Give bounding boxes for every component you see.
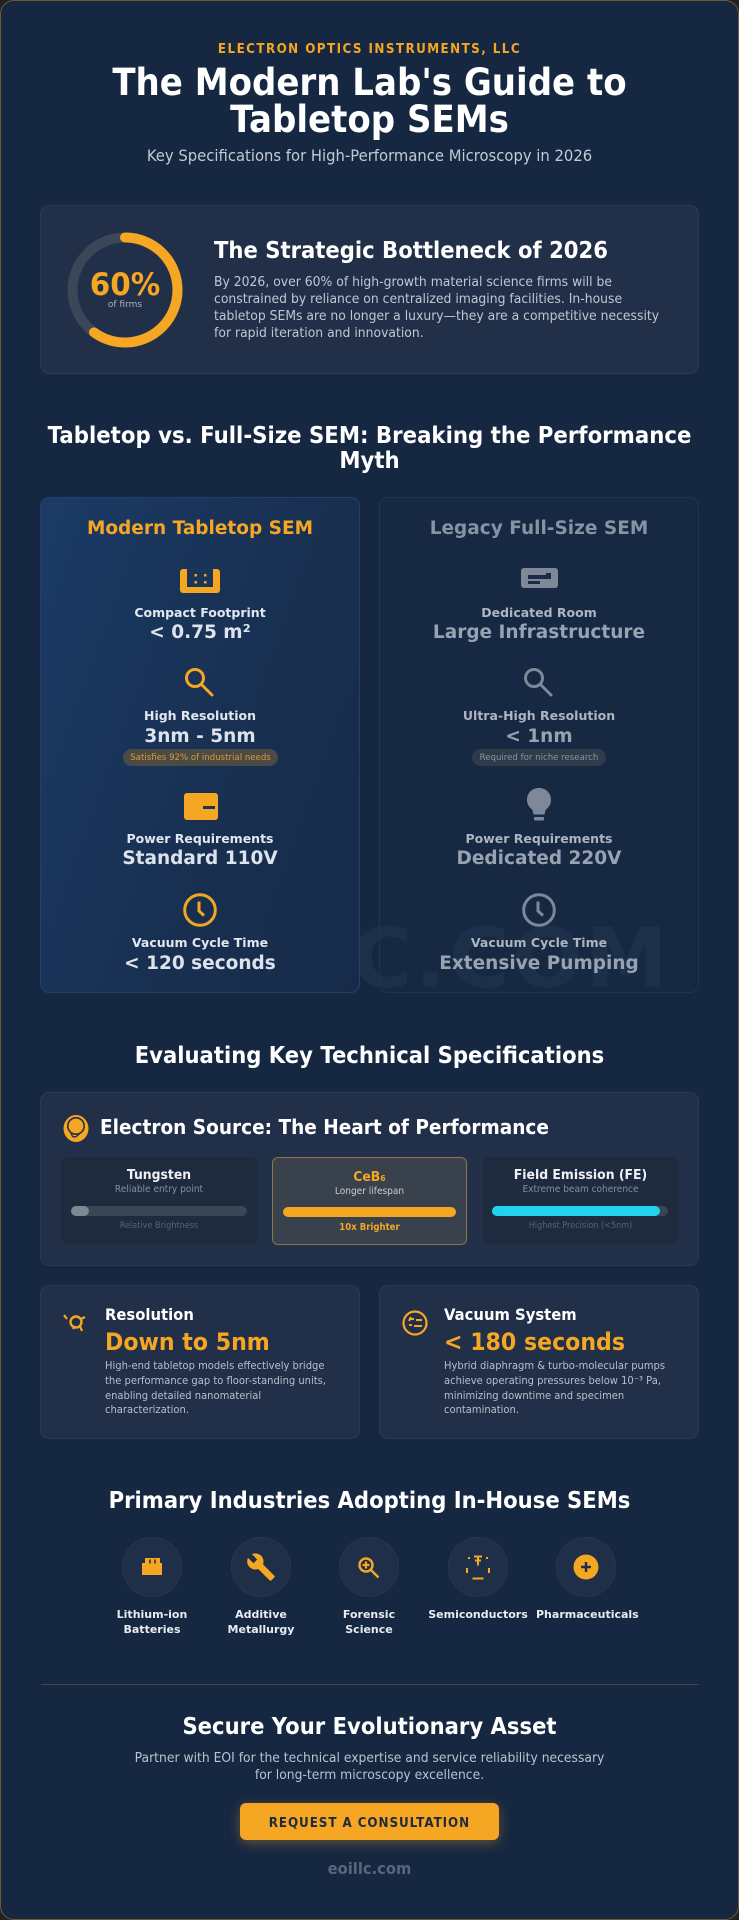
brightness bar <box>71 1206 247 1216</box>
section heading: specifications: Evaluating Key Technical Specifications <box>135 1043 604 1069</box>
icon: clock <box>183 893 217 927</box>
note pill <box>472 749 606 766</box>
CTA body text <box>31 1750 708 1784</box>
icon: clock <box>522 893 556 927</box>
icon: vacuum <box>402 1310 428 1336</box>
company name: ELECTRON OPTICS INSTRUMENTS, LLC <box>218 42 521 57</box>
title: The Modern Lab's Guide to <box>112 61 627 104</box>
card: field emission <box>483 1157 678 1244</box>
title <box>112 61 627 140</box>
spec: power requirements <box>122 793 278 869</box>
spec: high resolution <box>123 668 278 766</box>
CTA button <box>240 1803 499 1840</box>
card: tungsten <box>61 1157 257 1244</box>
icon: bulb <box>527 788 551 820</box>
caption: 10x Brighter <box>339 1222 400 1233</box>
label: Metallurgy <box>228 1622 294 1636</box>
value: < 1nm <box>505 726 573 747</box>
panel body text: By 2026, over 60% of high-growth material science firms will be <box>214 274 612 290</box>
call to action <box>135 1714 604 1878</box>
spec: ultra-high resolution <box>463 668 615 766</box>
name: Field Emission (FE) <box>514 1167 647 1183</box>
panel body text: tabletop SEMs are no longer a luxury—they are a competitive necessity <box>214 308 659 324</box>
panel body text: constrained by reliance on centralized imaging facilities. In-house <box>214 291 622 307</box>
card value: Down to 5nm <box>105 1328 270 1356</box>
label: Power Requirements <box>126 831 274 846</box>
section heading: comparison: Myth <box>339 448 400 474</box>
panel: resolution <box>40 1285 360 1439</box>
name: CeB₆ <box>353 1169 386 1185</box>
caption: Relative Brightness <box>120 1221 198 1231</box>
panel heading: Electron Source: The Heart of Performance <box>100 1115 549 1139</box>
panel: electron source <box>40 1092 699 1266</box>
card body text: minimizing downtime and specimen <box>444 1389 624 1402</box>
value: Dedicated 220V <box>457 848 621 869</box>
description: Extreme beam coherence <box>522 1184 639 1195</box>
label: Lithium-ion <box>117 1608 187 1620</box>
donut value: 60% <box>90 267 160 303</box>
spec: vacuum cycle time <box>439 893 639 974</box>
column heading: Modern Tabletop SEM <box>87 518 313 539</box>
value: Standard 110V <box>122 848 278 869</box>
label: Vacuum Cycle Time <box>132 935 268 950</box>
label <box>228 1608 294 1636</box>
donut chart: 60% of firms <box>68 232 182 348</box>
card heading: Vacuum System <box>444 1305 577 1324</box>
label: Batteries <box>124 1622 180 1636</box>
label: Science <box>345 1622 393 1636</box>
value: 3nm - 5nm <box>144 726 256 747</box>
section heading: industries: Primary Industries Adopting In-House SEMs <box>109 1488 630 1514</box>
label <box>343 1608 395 1636</box>
label: Semiconductors <box>428 1608 528 1620</box>
brightness bar <box>492 1206 668 1216</box>
brightness bar <box>283 1207 456 1217</box>
icon: semiconductor <box>448 1537 508 1597</box>
card body text <box>105 1359 326 1416</box>
card body text: the performance gap to floor-standing units, <box>105 1374 326 1387</box>
label: Additive <box>235 1608 287 1620</box>
icon: resolution <box>63 1314 86 1332</box>
panel body text <box>214 274 659 341</box>
note pill: Required for niche research <box>480 753 598 763</box>
title: Tabletop SEMs <box>230 98 509 140</box>
panel body text: for rapid iteration and innovation. <box>214 325 424 341</box>
label: Pharmaceuticals <box>536 1608 639 1620</box>
watermark: EOILLC.COM <box>75 910 670 1007</box>
spec: dedicated room <box>433 568 645 643</box>
caption: Highest Precision (<5nm) <box>529 1221 632 1231</box>
CTA body text: Partner with EOI for the technical expertise and service reliability necessary <box>135 1750 604 1766</box>
industry: pharmaceuticals <box>536 1537 639 1620</box>
icon: magnifier with plus <box>339 1537 399 1597</box>
industry: semiconductors <box>428 1537 528 1620</box>
label <box>117 1608 187 1636</box>
icon: magnifier <box>524 668 553 696</box>
panel: vacuum system <box>379 1285 699 1439</box>
subtitle: Key Specifications for High-Performance Microscopy in 2026 <box>147 146 592 165</box>
value: Large Infrastructure <box>433 622 645 643</box>
icon: electron source <box>64 1115 88 1142</box>
description: Reliable entry point <box>115 1184 203 1195</box>
panel: strategic bottleneck <box>40 205 699 374</box>
value: Extensive Pumping <box>439 953 639 974</box>
icon: magnifier <box>185 668 214 697</box>
value: < 120 seconds <box>124 953 276 974</box>
card: CeB6 highlighted <box>272 1157 467 1245</box>
icon: medical plus <box>556 1537 616 1597</box>
industry: additive metallurgy <box>228 1537 294 1636</box>
spec: power requirements <box>457 788 622 869</box>
card body text: Hybrid diaphragm & turbo-molecular pumps <box>444 1359 665 1372</box>
label: Dedicated Room <box>481 605 597 620</box>
panel heading: The Strategic Bottleneck of 2026 <box>214 238 608 264</box>
card body text: High-end tabletop models effectively bridge <box>105 1359 324 1372</box>
CTA body text: for long-term microscopy excellence. <box>255 1767 484 1783</box>
card body text <box>444 1359 665 1416</box>
note pill: Satisfies 92% of industrial needs <box>130 753 271 763</box>
label: Ultra-High Resolution <box>463 708 615 723</box>
name: Tungsten <box>127 1167 191 1183</box>
label: Compact Footprint <box>134 605 266 620</box>
spec: vacuum cycle time <box>124 893 276 974</box>
CTA button: REQUEST A CONSULTATION <box>269 1816 470 1831</box>
icon: battery <box>122 1537 182 1597</box>
section heading: comparison <box>48 423 691 474</box>
card value: < 180 seconds <box>444 1328 625 1356</box>
label: Forensic <box>343 1608 395 1620</box>
icon: power <box>184 793 218 820</box>
description: Longer lifespan <box>335 1186 404 1197</box>
note pill <box>123 749 278 766</box>
icon: wrench <box>231 1537 291 1597</box>
column heading: Legacy Full-Size SEM <box>430 518 648 539</box>
panel: modern tabletop SEM <box>40 497 360 993</box>
industry: lithium-ion batteries <box>117 1537 187 1636</box>
icon: footprint <box>180 569 220 593</box>
value: < 0.75 m² <box>149 622 251 643</box>
icon: room <box>521 568 558 588</box>
card body text: achieve operating pressures below 10⁻³ Pa, <box>444 1374 661 1387</box>
section heading: comparison: Tabletop vs. Full-Size SEM: Breaking the Performance <box>48 423 691 449</box>
label: Power Requirements <box>466 831 612 846</box>
industry: forensic science <box>339 1537 399 1636</box>
panel: legacy full-size SEM <box>379 497 699 993</box>
label: Vacuum Cycle Time <box>471 935 607 950</box>
label: High Resolution <box>144 708 256 723</box>
card heading: Resolution <box>105 1305 194 1324</box>
card body text: contamination. <box>444 1403 519 1416</box>
donut caption: of firms <box>108 300 142 310</box>
card body text: enabling detailed nanomaterial <box>105 1389 261 1402</box>
website: eoillc.com <box>328 1859 411 1878</box>
spec: compact footprint <box>134 569 266 643</box>
CTA heading: Secure Your Evolutionary Asset <box>182 1714 557 1740</box>
card body text: characterization. <box>105 1403 189 1416</box>
header <box>112 42 627 165</box>
